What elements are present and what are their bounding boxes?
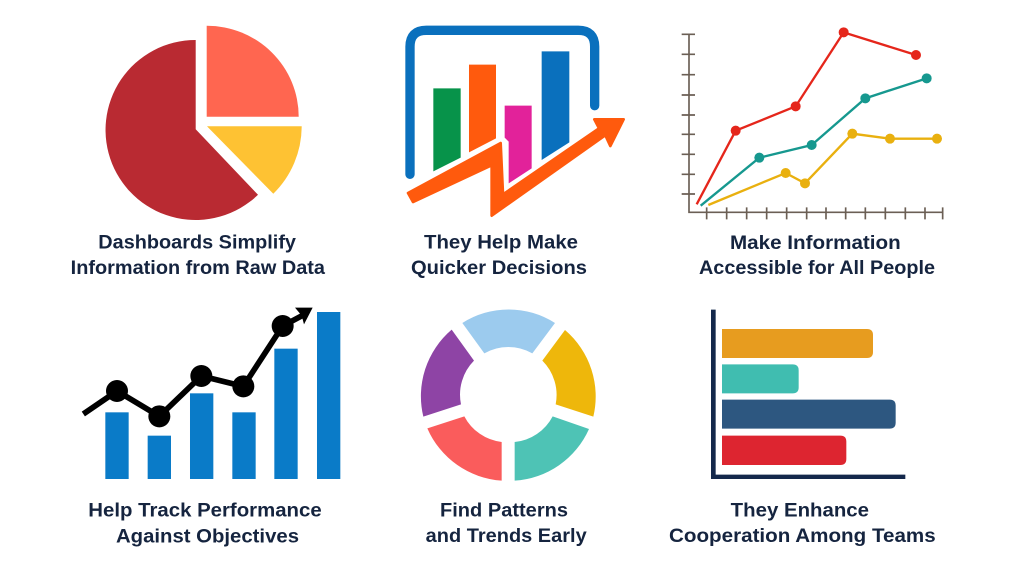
chart: bars with trend line — [83, 308, 340, 479]
heading: accessible information: Accessible for All People — [699, 257, 935, 279]
heading: quicker decisions: They Help Make — [424, 231, 578, 253]
heading: track performance — [88, 500, 322, 547]
heading: patterns and trends — [426, 500, 587, 547]
heading: patterns and trends: and Trends Early — [426, 525, 587, 547]
chart: horizontal bar chart — [711, 310, 905, 479]
heading: team cooperation — [669, 500, 936, 547]
heading: track performance: Against Objectives — [116, 525, 299, 547]
trend line with arrow — [83, 308, 313, 427]
rising zigzag arrow — [408, 119, 624, 216]
icon: exploded pie chart — [106, 26, 302, 220]
chart: five-segment donut — [421, 309, 596, 481]
red series — [697, 27, 921, 204]
panel: quicker decisions — [408, 30, 624, 279]
panel: accessible information — [682, 27, 943, 279]
heading: quicker decisions: Quicker Decisions — [411, 257, 587, 279]
heading: team cooperation: They Enhance — [731, 500, 869, 522]
heading: dashboards simplify: Information from Raw Data — [71, 257, 325, 279]
icon: bar chart with rising arrow — [408, 30, 624, 216]
bars — [433, 51, 569, 183]
axes — [711, 310, 905, 479]
heading: dashboards simplify: Dashboards Simplify — [98, 231, 296, 253]
panel: dashboards simplify information — [71, 26, 325, 279]
frame bracket — [410, 30, 595, 174]
teal series — [701, 73, 932, 206]
panel: track performance — [83, 308, 340, 547]
bars — [722, 329, 896, 465]
heading: team cooperation: Cooperation Among Teams — [669, 525, 936, 547]
heading: patterns and trends: Find Patterns — [440, 500, 568, 522]
chart: three-series line chart — [682, 27, 943, 219]
heading: quicker decisions — [411, 231, 587, 279]
yellow series — [708, 129, 942, 205]
heading: track performance: Help Track Performance — [88, 500, 322, 522]
heading: accessible information — [699, 232, 935, 279]
panel: team cooperation — [669, 310, 936, 547]
panel: patterns and trends — [421, 309, 596, 547]
heading: dashboards simplify — [71, 231, 325, 279]
axes and ticks — [682, 34, 943, 219]
heading: accessible information: Make Information — [730, 232, 901, 254]
blue bars — [105, 312, 340, 479]
